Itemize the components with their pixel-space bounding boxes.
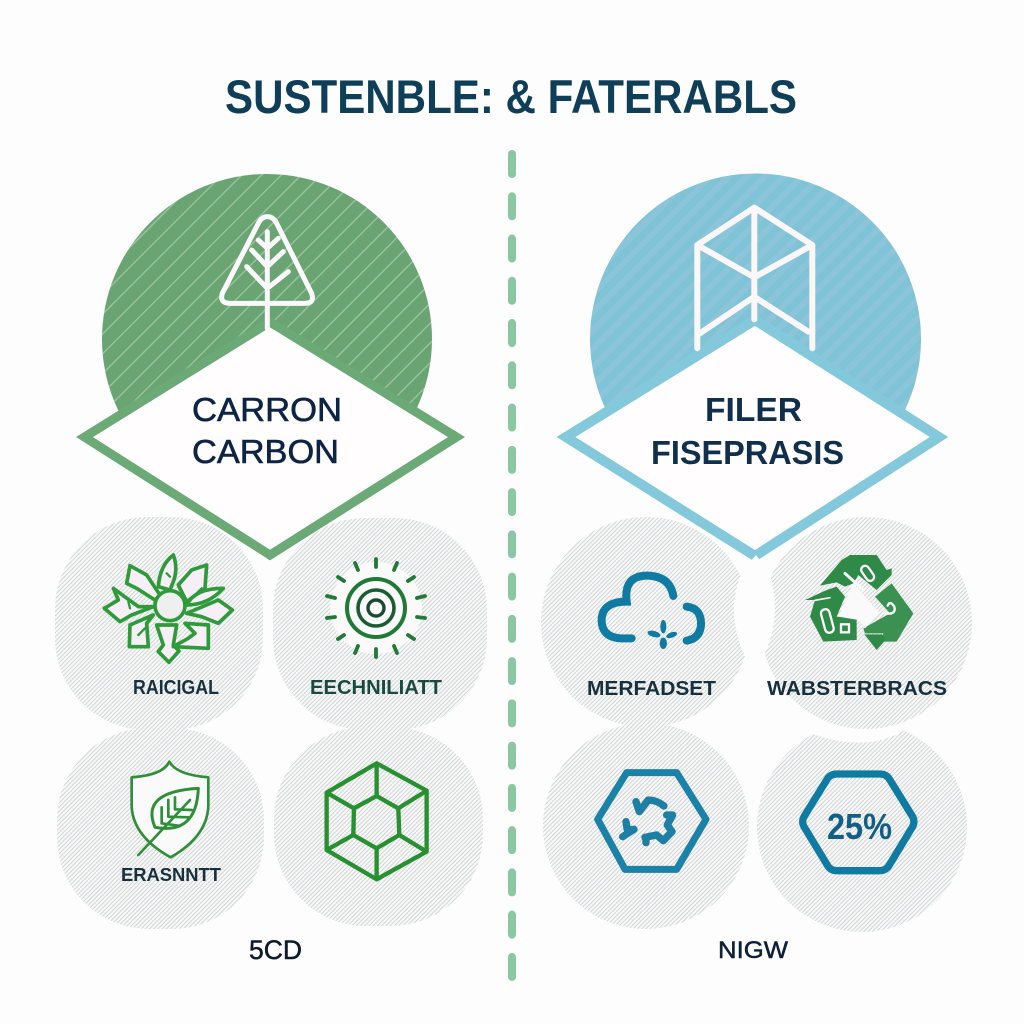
center dashed divider — [508, 154, 516, 980]
card background — [760, 517, 972, 729]
card background — [543, 723, 749, 929]
label: RAICIGAL — [133, 677, 219, 699]
fiber diamond — [566, 320, 939, 556]
blue striped circle — [590, 174, 921, 504]
card background — [57, 728, 264, 929]
icon: cloud with sprout — [602, 576, 701, 649]
green hatched circle — [102, 174, 432, 504]
label: EECHNILIATT — [310, 677, 442, 699]
fiber heading: FISEPRASIS — [651, 434, 844, 471]
label: MERFADSET — [587, 678, 716, 700]
title: SUSTENBLE: & FATERABLS — [225, 70, 797, 123]
icon: recycle symbol — [805, 555, 913, 650]
icon: shield with leaf — [132, 762, 208, 857]
icon: hexagon with arrows — [598, 773, 706, 869]
white notch between cards — [734, 555, 775, 667]
footer label: right: NIGW — [718, 937, 788, 964]
icon: frame — [697, 208, 812, 348]
card: gem — [274, 727, 483, 926]
fiber heading — [651, 391, 844, 471]
stat value: 25% — [827, 806, 892, 847]
fiber heading: FILER — [705, 391, 802, 428]
carbon heading: CARRON — [192, 391, 342, 428]
card: hexagon recycle — [543, 723, 749, 929]
card: erasnntt — [57, 728, 264, 929]
top notch of card — [785, 716, 908, 743]
icon: tree in triangle — [222, 217, 312, 328]
footer label: left: 5CD — [249, 935, 302, 965]
card background — [273, 518, 487, 730]
card: merfadset — [541, 517, 751, 727]
icon: sun target — [327, 559, 425, 657]
card background — [541, 517, 751, 727]
panel: carbon — [84, 174, 456, 555]
carbon heading: CARBON — [192, 433, 339, 470]
card: wabsterbracs — [734, 517, 972, 729]
card: raicigal — [55, 517, 263, 730]
icon: rounded hexagon — [803, 774, 914, 871]
icon: leaf flower — [104, 555, 232, 662]
icon: hexagonal gem — [327, 763, 427, 879]
card: 25 percent — [757, 716, 967, 932]
card background — [757, 722, 967, 932]
label: WABSTERBRACS — [767, 678, 947, 700]
carbon heading — [192, 391, 342, 470]
card background — [55, 517, 263, 730]
panel: fiber — [566, 174, 939, 556]
card: eechniliatt — [273, 518, 487, 730]
card background — [274, 727, 483, 926]
carbon diamond — [84, 322, 456, 555]
label: ERASNNTT — [121, 865, 221, 885]
